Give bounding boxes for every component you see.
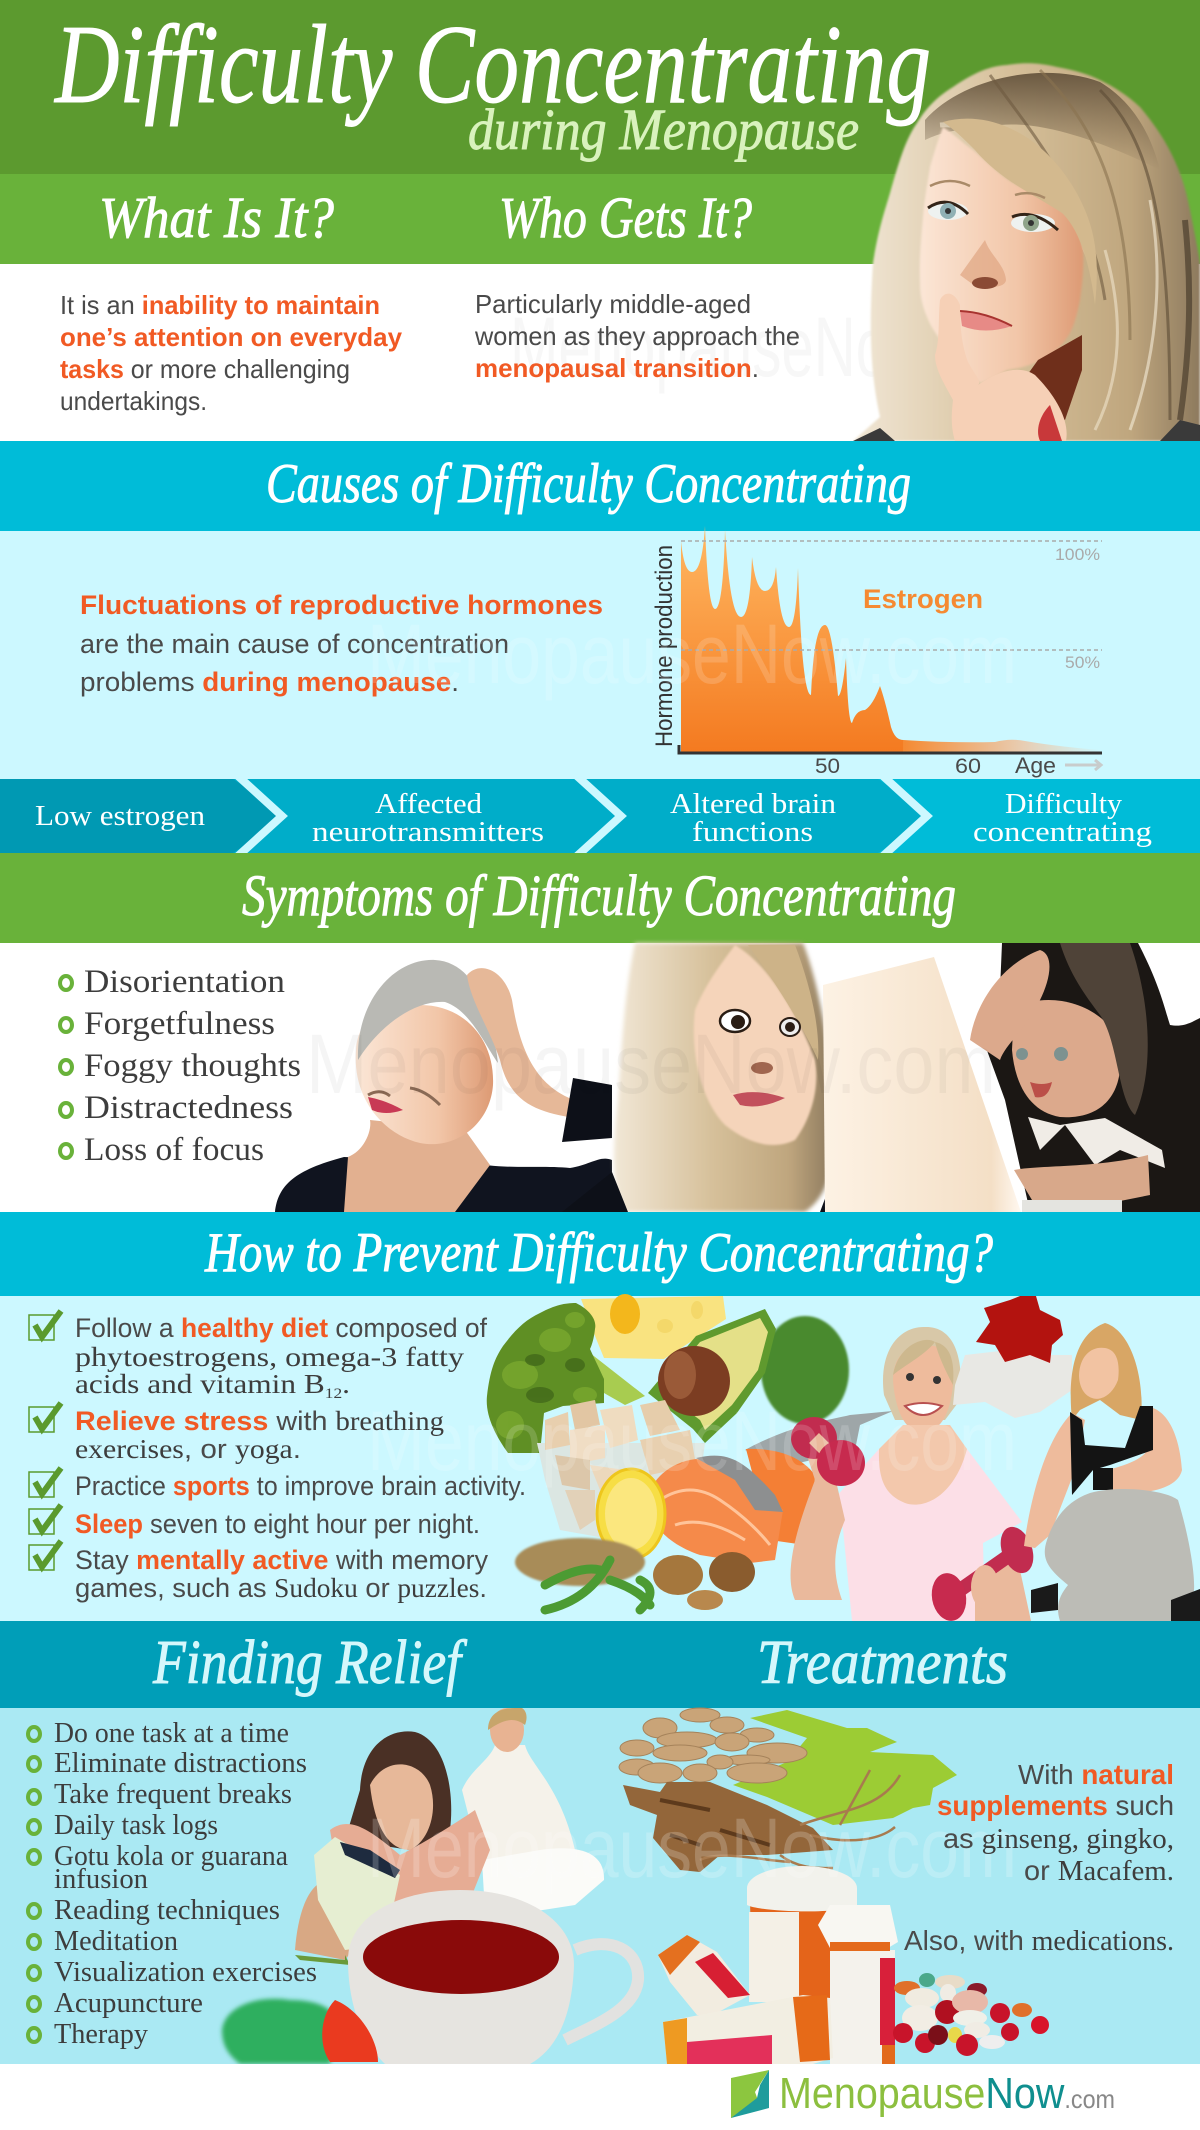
- text: treatments: as ginseng, gingko,: [943, 1823, 1174, 1855]
- tip text: Sleep seven to eight hour per night.: [75, 1509, 480, 1539]
- chart: estrogen decline: 50%: [1065, 653, 1100, 672]
- panel: definition: MenopauseNow: [510, 300, 930, 394]
- lentils: [515, 1538, 645, 1586]
- step: altered brain functions: Altered brain: [670, 788, 837, 820]
- bullet list: relief: Take frequent breaks: [54, 1778, 292, 1810]
- step: affected neurotransmitters: neurotransmitters: [312, 816, 544, 848]
- chart: estrogen decline: 60: [955, 755, 981, 778]
- bullet list: relief: Visualization exercises: [54, 1956, 317, 1988]
- step: affected neurotransmitters: Affected: [375, 788, 483, 820]
- heading: treatments: Treatments: [757, 1629, 1008, 1697]
- photo: seated woman: [1024, 1323, 1200, 1621]
- panel: prevention: MenopauseNow.com: [367, 1394, 1017, 1488]
- text: cause explanation: are the main cause of concentration: [80, 629, 509, 659]
- photo: blonde woman looking sideways: [562, 943, 870, 1212]
- chart label: y axis: Hormone production: [651, 545, 678, 747]
- logo wordmark: MenopauseNow.com: [779, 2069, 1115, 2118]
- eyes: [928, 202, 968, 220]
- panel: prevention: [0, 1294, 1200, 1624]
- text: cause explanation: problems during menopause .: [80, 667, 459, 697]
- bullet list: relief: Gotu kola or guarana: [54, 1840, 288, 1872]
- section header: prevention: [0, 1212, 1200, 1296]
- tip text: Follow a healthy diet composed of: [75, 1313, 487, 1343]
- text: who gets it: women as they approach the: [474, 321, 800, 351]
- image: leaf and strawberry: [222, 1999, 378, 2064]
- image: jigsaw puzzle: [953, 1296, 1072, 1418]
- panel: causes: [0, 526, 1200, 779]
- tip text: Stay mentally active with memory: [75, 1545, 488, 1575]
- subtitle: during Menopause: [468, 97, 859, 162]
- image: ginseng root: [623, 1770, 900, 1872]
- avocado half: [648, 1309, 776, 1443]
- lips: [960, 311, 1012, 330]
- image: herbal tablets: [619, 1708, 807, 1783]
- text: who gets it: Particularly middle-aged: [475, 289, 751, 319]
- text: treatments: [904, 1759, 1174, 1957]
- chart label: series: Estrogen: [863, 584, 983, 614]
- image: tea cup: [348, 1890, 638, 2064]
- text: treatments: With natural: [1018, 1759, 1174, 1790]
- text: what is it: undertakings.: [60, 386, 207, 416]
- text: treatments: supplements such: [937, 1790, 1174, 1821]
- icon: logo: [731, 2070, 769, 2118]
- bullet list: relief: Acupuncture: [54, 1987, 203, 2019]
- chart: estrogen decline: Age: [1015, 753, 1056, 778]
- section header: relief and treatments: [0, 1621, 1200, 1708]
- tip text: [75, 1313, 526, 1603]
- text: what is it: one’s attention on everyday: [60, 322, 403, 352]
- lemon: [597, 1469, 665, 1559]
- hair mass: [853, 63, 1200, 441]
- tofu bowl: [537, 1443, 705, 1539]
- step: low estrogen: Low estrogen: [35, 800, 206, 832]
- whole avocado: [761, 1316, 849, 1424]
- text: who gets it: menopausal transition.: [475, 353, 759, 383]
- photo: woman reading: [295, 1731, 490, 1965]
- chart: estrogen decline: 100%: [1055, 545, 1100, 564]
- bullet list: relief: Therapy: [54, 2018, 148, 2050]
- checkbox icons: [29, 1311, 61, 1570]
- bullet list: symptoms: Distractedness: [84, 1090, 293, 1126]
- cheese: [581, 1296, 726, 1359]
- bullet list: symptoms: Disorientation: [84, 964, 285, 1000]
- photo: stressed dark haired woman: [970, 943, 1200, 1212]
- arrow: age axis: [1065, 760, 1101, 770]
- text: treatments: or Macafem.: [1024, 1855, 1174, 1887]
- heading: causes: Causes of Difficulty Concentrating: [266, 453, 911, 515]
- bullet list: relief: infusion: [54, 1863, 148, 1895]
- photo: meditating woman: [462, 1708, 604, 1912]
- section header: symptoms: [0, 853, 1200, 943]
- tip text: games, such as Sudoku or puzzles.: [75, 1573, 487, 1603]
- text: cause explanation: [80, 590, 603, 697]
- header banner: [0, 0, 1200, 174]
- step: difficulty concentrating: Difficulty: [1005, 788, 1123, 820]
- image: ginkgo leaves: [733, 1710, 957, 1825]
- photo: laptop: [823, 957, 1021, 1212]
- image: colorful pills: [893, 1973, 1049, 2056]
- band: what and who headings: [0, 174, 1200, 264]
- text: treatments: Also, with medications.: [904, 1925, 1174, 1957]
- step: altered brain functions: [670, 788, 837, 848]
- image: healthy food: [487, 1294, 893, 1610]
- chart: estrogen decline: [651, 526, 1102, 778]
- text: what is it: tasks or more challenging: [60, 354, 350, 384]
- bullet list: relief: [28, 1717, 317, 2050]
- face: [920, 127, 1083, 383]
- bullet list: relief: Eliminate distractions: [54, 1747, 307, 1779]
- bullet list: relief: Daily task logs: [54, 1809, 218, 1841]
- bullet list: symptoms: Loss of focus: [84, 1132, 264, 1168]
- heading: prevention: How to Prevent Difficulty Concentrating?: [204, 1222, 993, 1284]
- heading: finding relief: Finding Relief: [152, 1629, 468, 1697]
- neck shadow: [1020, 335, 1082, 420]
- panel: symptoms: MenopauseNow.com: [306, 1017, 996, 1111]
- nose: [960, 240, 1006, 287]
- text: cause explanation: Fluctuations of reproductive hormones: [80, 590, 603, 620]
- tip text: .: [342, 1369, 350, 1399]
- photo: grey haired woman: [275, 960, 612, 1212]
- panel: definition: [0, 264, 1200, 441]
- text: who gets it: [474, 289, 800, 383]
- tip text: acids and vitamin B: [75, 1369, 290, 1399]
- tip text: Relieve stress with breathing: [75, 1406, 444, 1436]
- bullet list: symptoms: Forgetfulness: [84, 1006, 275, 1042]
- image: pill bottles: [658, 1866, 898, 2064]
- tip text: exercises , or yoga.: [75, 1434, 301, 1464]
- panel: relief and treatments: MenopauseNow.com: [367, 1801, 1017, 1895]
- green peas: [545, 1560, 650, 1610]
- photo: thoughtful blonde woman: [853, 63, 1200, 441]
- bullet list: relief: Do one task at a time: [54, 1717, 289, 1749]
- panel: causes: MenopauseNow.com: [367, 607, 1017, 701]
- bullet list: symptoms: Foggy thoughts: [84, 1048, 301, 1084]
- tip text: 12: [325, 1386, 342, 1402]
- text: what is it: It is an inability to maintain: [60, 290, 380, 320]
- bullet list: relief: Meditation: [54, 1925, 178, 1957]
- hand: [935, 294, 1067, 441]
- bullet list: symptoms: [60, 964, 301, 1168]
- walnuts: [653, 1552, 755, 1610]
- section header: causes: [0, 441, 1200, 531]
- photo: woman with dumbbells: [791, 1327, 1039, 1624]
- heading: symptoms: Symptoms of Difficulty Concentrating: [242, 863, 956, 928]
- tip text: phytoestrogens, omega-3 fatty: [75, 1342, 465, 1372]
- title: Difficulty Concentrating: [53, 3, 931, 127]
- text: what is it: [60, 290, 403, 416]
- step: altered brain functions: functions: [692, 816, 813, 848]
- broccoli: [590, 1353, 645, 1405]
- panel: relief and treatments: [0, 1708, 1200, 2064]
- checklist: prevention tips: [29, 1311, 526, 1603]
- step: difficulty concentrating: concentrating: [973, 816, 1152, 848]
- step: affected neurotransmitters: [312, 788, 544, 848]
- panel: symptoms: [0, 943, 1200, 1212]
- heading: who gets it: Who Gets It?: [499, 185, 752, 250]
- tip text: Practice sports to improve brain activity.: [75, 1471, 526, 1501]
- heading: what is it: What Is It?: [99, 185, 334, 250]
- fish: [745, 1411, 893, 1465]
- bangs: [943, 119, 1097, 305]
- process flow chevrons: [0, 776, 1200, 856]
- chart: estrogen decline: 50: [815, 755, 840, 778]
- footer logo: [0, 2064, 1200, 2130]
- step: difficulty concentrating: [973, 788, 1152, 848]
- bullet list: relief: Reading techniques: [54, 1894, 280, 1926]
